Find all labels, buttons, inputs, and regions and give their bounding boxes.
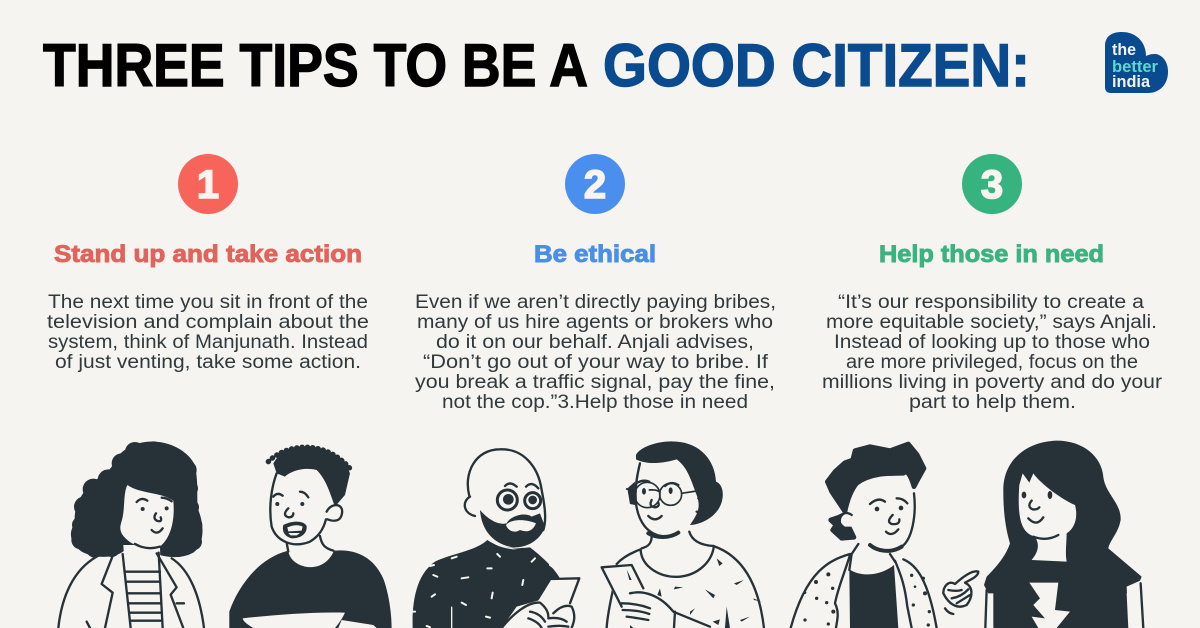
body text tip 3: part to help them. [909, 392, 1076, 413]
body text tip 2 [415, 292, 776, 413]
panel: tip 1 [47, 154, 369, 373]
number badge 3: 3 [981, 163, 1003, 207]
body text tip 3: millions living in poverty and do your [822, 372, 1163, 393]
body text tip 1: The next time you sit in front of the [48, 292, 368, 313]
number badge 2: 2 [584, 163, 606, 207]
illustration: man with wavy hair, polka-dot shirt, pointing [791, 444, 978, 628]
logo: the better india heart: the [1112, 40, 1136, 59]
illustration: woman with curly hair and blazer [58, 441, 204, 628]
body text tip 3: “It’s our responsibility to create a [838, 292, 1144, 313]
illustration: woman with glasses and phone [602, 441, 764, 628]
title: THREE TIPS TO BE A [43, 32, 588, 99]
title: GOOD CITIZEN: [603, 32, 1030, 99]
number badge 2 [565, 154, 625, 214]
title [43, 32, 1030, 99]
body text tip 2: many of us hire agents or brokers who [417, 312, 773, 333]
body text tip 1: television and complain about the [47, 312, 369, 333]
body text tip 2: Even if we aren’t directly paying bribes, [415, 292, 776, 313]
panel: tip 3 [822, 154, 1163, 413]
body text tip 2: not the cop.”3.Help those in need [442, 392, 748, 413]
body text tip 1 [47, 292, 369, 373]
body text tip 3: Instead of looking up to those who [834, 332, 1150, 353]
body text tip 3: more equitable society,” says Anjali. [826, 312, 1157, 333]
number badge 1 [178, 154, 238, 214]
illustration: man with spiky hair and dark t-shirt [229, 446, 392, 628]
logo: the better india heart [1105, 32, 1168, 93]
body text tip 3 [822, 292, 1163, 413]
logo: the better india heart: better [1112, 57, 1158, 76]
panel: tip 2 [415, 154, 776, 413]
body text tip 3: are more privileged, focus on the [846, 352, 1138, 373]
body text tip 2: you break a traffic signal, pay the fine, [415, 372, 775, 393]
illustration: bald man with beard, dark sweater and phone [413, 449, 579, 628]
body text tip 2: do it on our behalf. Anjali advises, [436, 332, 754, 353]
logo: the better india heart: india [1112, 72, 1151, 91]
number badge 3 [962, 154, 1022, 214]
body text tip 2: “Don’t go out of your way to bribe. If [423, 352, 769, 373]
number badge 1: 1 [197, 163, 219, 207]
heading: stand up and take action: Stand up and take action [54, 241, 362, 268]
heading: be ethical: Be ethical [534, 241, 656, 268]
body text tip 1: system, think of Manjunath. Instead [48, 332, 368, 353]
body text tip 1: of just venting, take some action. [55, 352, 361, 373]
illustration: woman with long dark hair and lightning t-shirt [984, 441, 1143, 628]
heading: help those in need: Help those in need [879, 241, 1104, 268]
